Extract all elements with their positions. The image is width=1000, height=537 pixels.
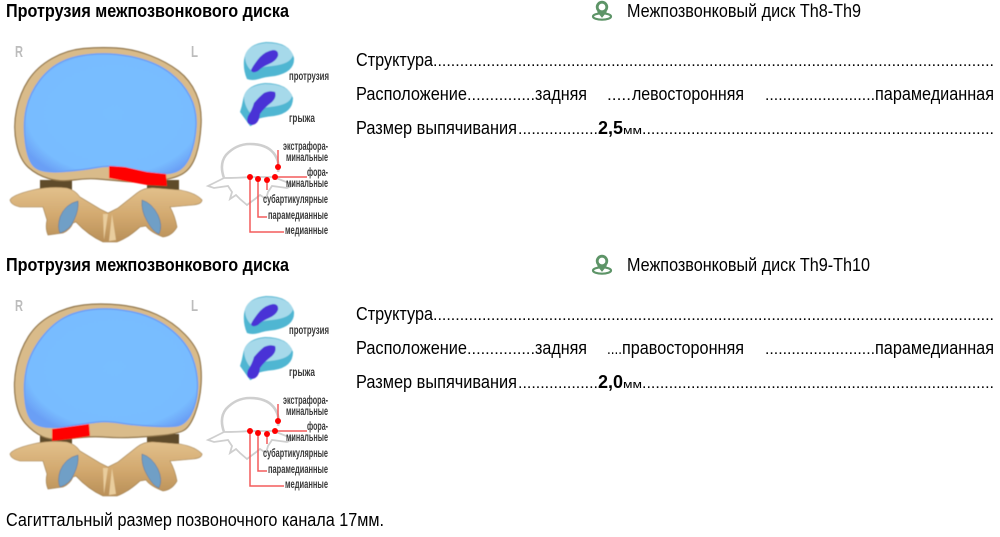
disc level label: Межпозвонковый диск Th8-Th9 bbox=[627, 1, 861, 21]
row: bulge size: 2,0 bbox=[598, 372, 623, 392]
label: hernia: грыжа bbox=[289, 113, 315, 125]
diagram: location zones: минальные bbox=[286, 432, 328, 444]
row: bulge size: 2,5 bbox=[598, 118, 623, 138]
row: bulge size: Размер выпячивания bbox=[356, 118, 517, 138]
label: L: L bbox=[191, 298, 198, 315]
diagram: location zones: медианные bbox=[285, 479, 328, 491]
icon: location pin bbox=[593, 2, 611, 20]
row: bulge size: ............................................................................... bbox=[642, 375, 994, 392]
row: location bbox=[356, 338, 994, 358]
row: bulge size: Размер выпячивания bbox=[356, 372, 517, 392]
title: first block: Протрузия межпозвонкового диска bbox=[6, 1, 290, 21]
row: structure: Структура bbox=[356, 50, 434, 70]
row: bulge size: .................. bbox=[518, 121, 598, 138]
row: location: ......................... bbox=[765, 87, 875, 104]
row: location: левосторонняя bbox=[632, 84, 744, 104]
diagram: location zones: минальные bbox=[286, 152, 328, 164]
diagram: location zones: экстрафора- bbox=[283, 395, 328, 407]
diagram: location zones: парамедианные bbox=[268, 210, 328, 222]
row: location: Расположение bbox=[356, 338, 467, 358]
row: location: Расположение bbox=[356, 84, 467, 104]
row: location: ..... bbox=[607, 87, 631, 104]
diagram: location zones bbox=[208, 395, 328, 491]
row: bulge size: .................. bbox=[518, 375, 598, 392]
title: second block: Протрузия межпозвонкового диска bbox=[6, 255, 290, 275]
footnote: sagittal canal size: Сагиттальный размер позвоночного канала 17мм. bbox=[6, 510, 384, 530]
row: bulge size: ............................................................................... bbox=[642, 121, 994, 138]
icon: disc protrusion and herniation bbox=[240, 296, 294, 380]
row: location: задняя bbox=[535, 338, 587, 358]
row: bulge size: мм bbox=[623, 379, 642, 391]
diagram: location zones: минальные bbox=[286, 406, 328, 418]
diagram: location zones: субартикулярные bbox=[263, 194, 328, 206]
label: hernia: грыжа bbox=[289, 367, 315, 379]
diagram: location zones: субартикулярные bbox=[263, 448, 328, 460]
row: bulge size: мм bbox=[623, 125, 642, 137]
diagram: location zones: фора- bbox=[307, 167, 328, 179]
diagram: location zones: фора- bbox=[307, 421, 328, 433]
label: protrusion: протрузия bbox=[289, 71, 329, 83]
diagram: location zones: парамедианные bbox=[268, 464, 328, 476]
row: location: правосторонняя bbox=[622, 338, 744, 358]
row: location: задняя bbox=[535, 84, 587, 104]
row: location: ............... bbox=[467, 341, 535, 358]
label: R: R bbox=[15, 44, 23, 61]
diagram: location zones bbox=[208, 141, 328, 237]
row: location bbox=[356, 84, 994, 104]
diagram: location zones: медианные bbox=[285, 225, 328, 237]
diagram: location zones: минальные bbox=[286, 178, 328, 190]
diagram: location zones: экстрафора- bbox=[283, 141, 328, 153]
icon: disc protrusion and herniation bbox=[240, 42, 294, 126]
row: location: ............... bbox=[467, 87, 535, 104]
label: L: L bbox=[191, 44, 198, 61]
row: bulge size bbox=[356, 118, 994, 138]
icon: location pin bbox=[593, 256, 611, 274]
row: structure: Структура bbox=[356, 304, 434, 324]
row: location: ......................... bbox=[765, 341, 875, 358]
illustration: vertebra with left protrusion bbox=[10, 48, 202, 242]
disc level label: Межпозвонковый диск Th9-Th10 bbox=[627, 255, 870, 275]
illustration: vertebra with right protrusion bbox=[10, 304, 202, 496]
label: protrusion: протрузия bbox=[289, 325, 329, 337]
row: bulge size bbox=[356, 372, 994, 392]
dotted leader: structure: .............................................................................................................................. bbox=[433, 307, 994, 324]
dotted leader: structure: .............................................................................................................................. bbox=[433, 53, 994, 70]
row: location: .... bbox=[607, 341, 622, 358]
label: R: R bbox=[15, 298, 23, 315]
